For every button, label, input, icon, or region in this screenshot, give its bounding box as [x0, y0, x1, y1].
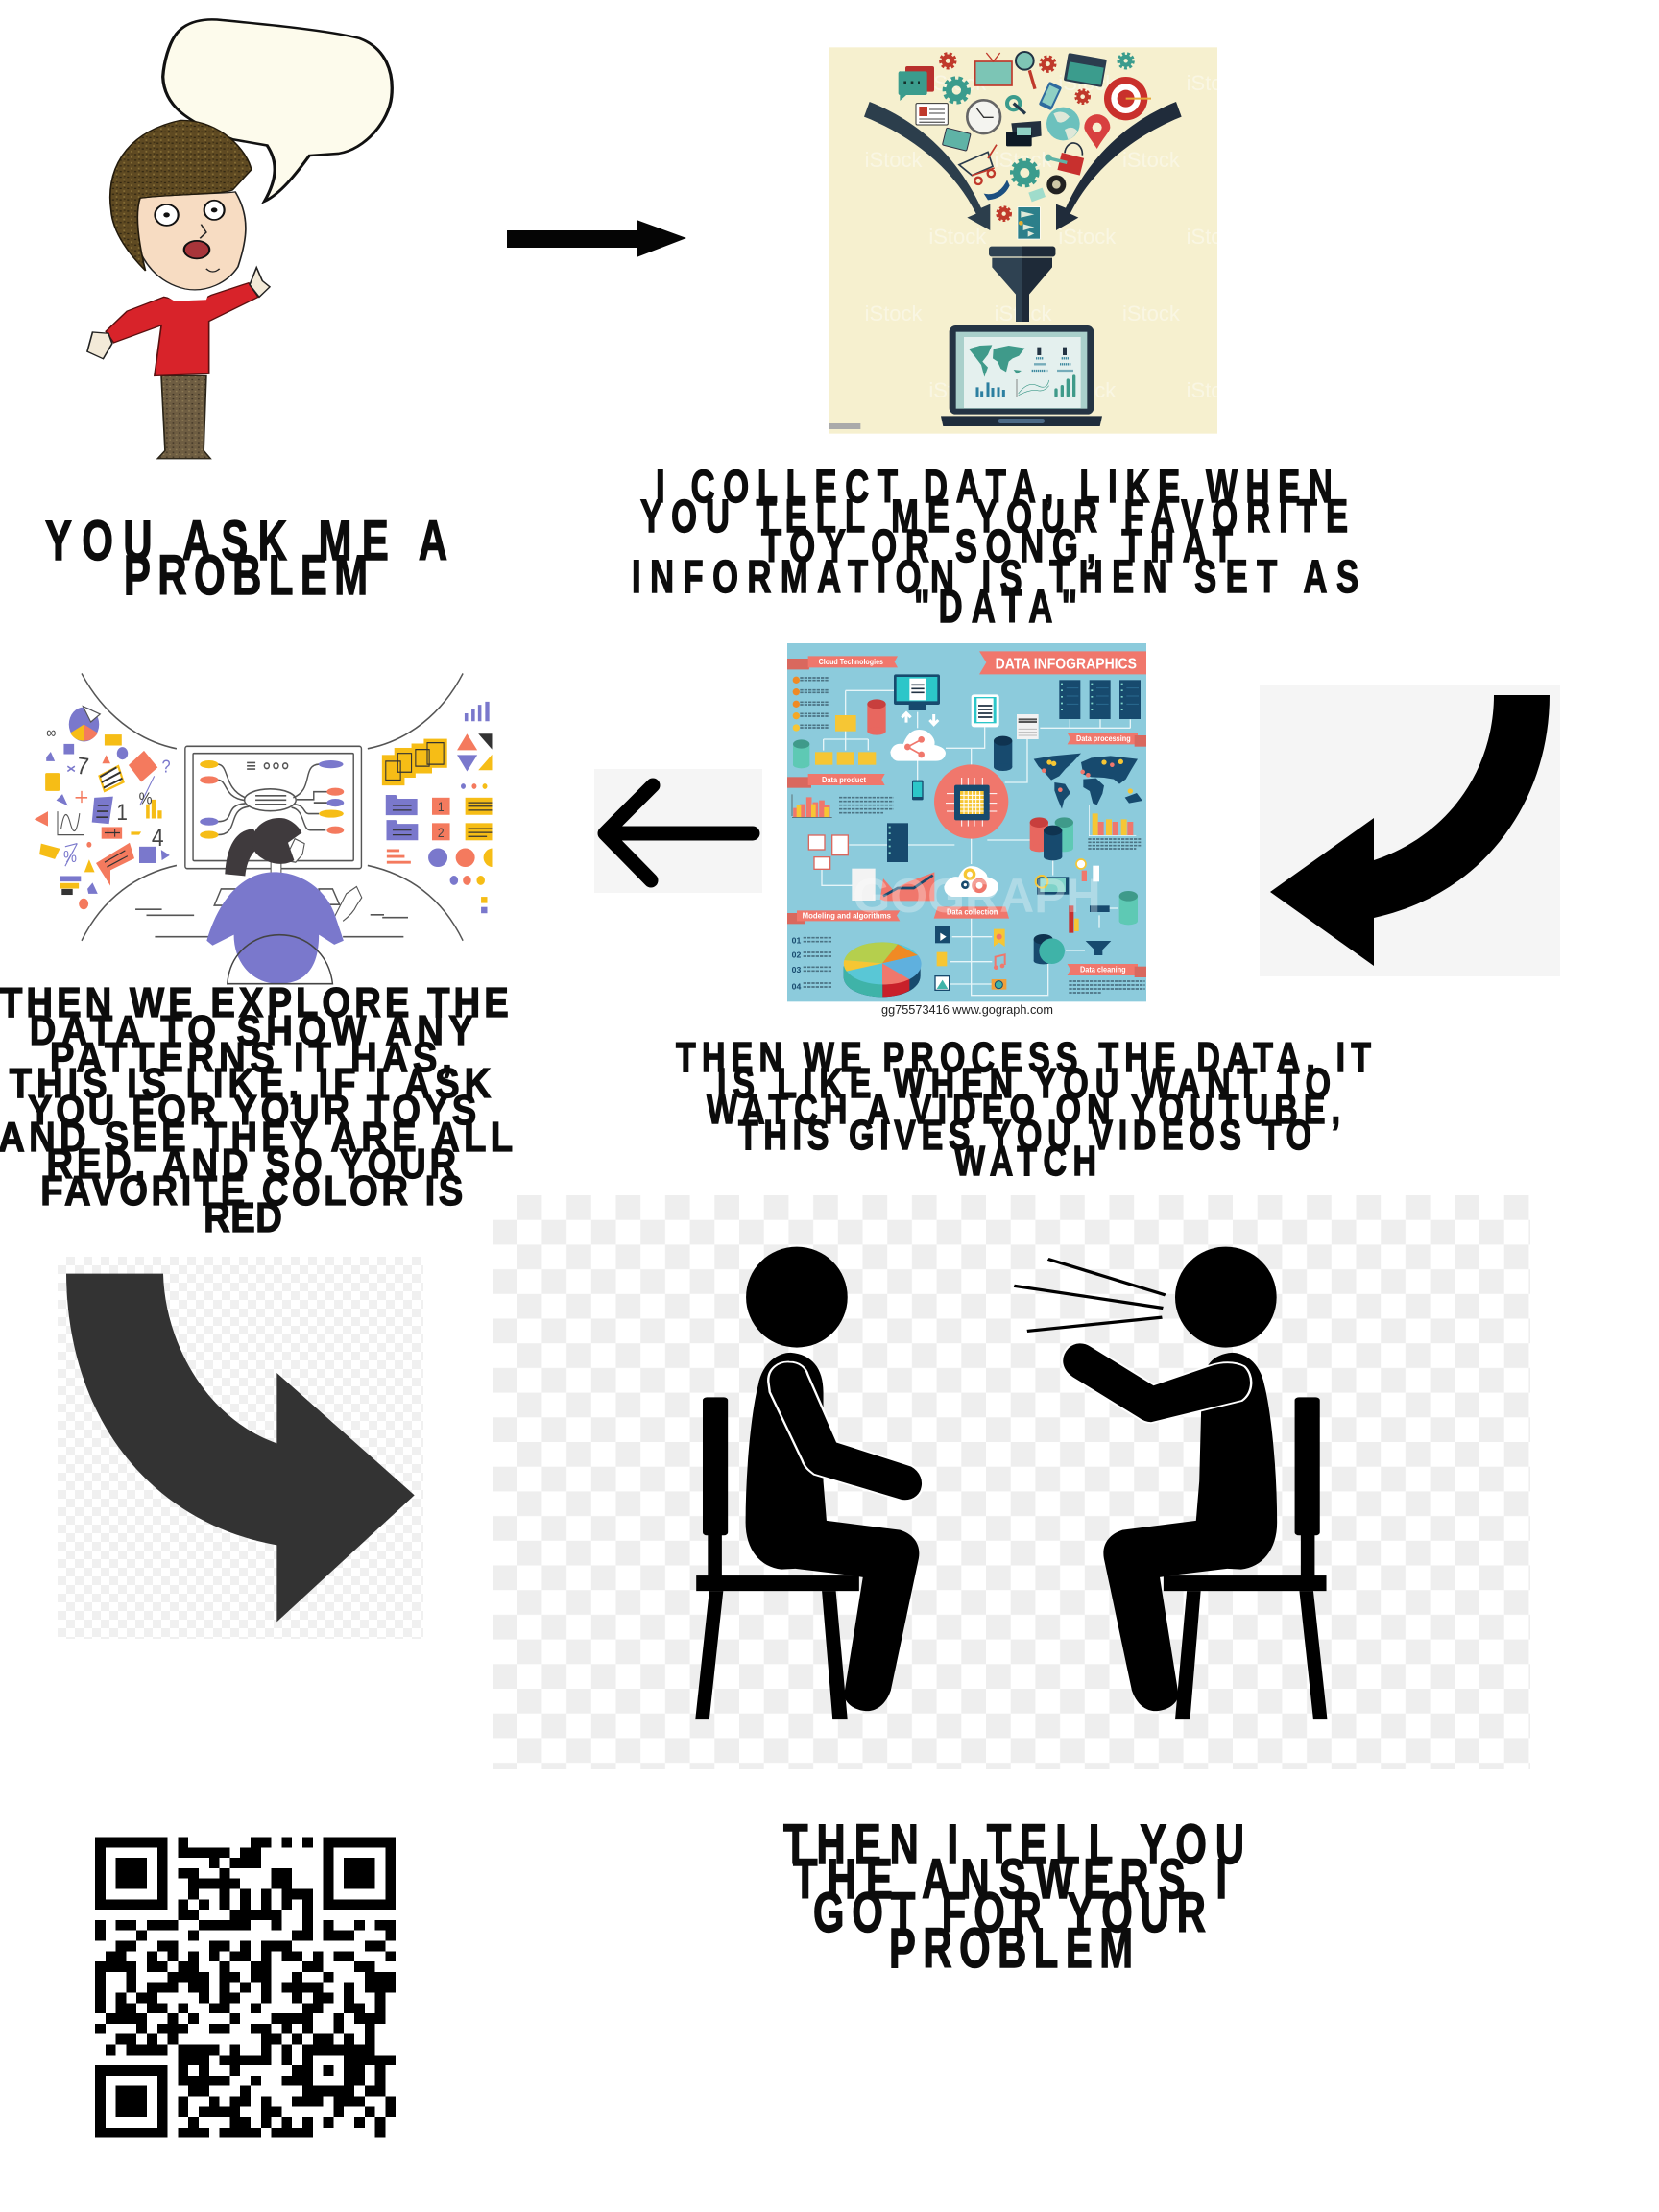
heading: step 2 caption: YOU TELL ME YOUR FAVORITE — [640, 490, 1348, 541]
cloud technology graphics — [815, 674, 1039, 800]
heading: step 5 caption: THE ANSWERS I — [793, 1847, 1227, 1911]
numbered list — [792, 935, 801, 991]
panel: data infographics poster — [787, 643, 1146, 1001]
heading: step 3 caption: THIS IS LIKE, IF I ASK — [10, 1060, 492, 1107]
hands — [87, 268, 270, 359]
heading: step 2 caption: INFORMATION IS THEN SET AS — [632, 550, 1358, 602]
hair — [110, 120, 252, 271]
speaker raised arm — [1062, 1342, 1251, 1423]
red sweater — [106, 283, 258, 375]
left data symbols: 4 — [152, 825, 164, 852]
database cylinders — [793, 699, 1138, 964]
watermarks: iStock — [1058, 378, 1117, 402]
watermarks: iStock — [928, 225, 987, 249]
left data symbols: % — [63, 847, 77, 866]
central chip — [934, 764, 1008, 839]
heading: step 2 caption: "DATA" — [914, 580, 1077, 632]
world map — [1034, 754, 1142, 809]
watermarks: iStock — [1187, 225, 1245, 249]
connector lines — [822, 690, 1130, 996]
heading: step 3 caption: YOU FOR YOUR TOYS — [28, 1087, 476, 1134]
watermarks: iStock — [928, 71, 987, 95]
heading: step 2 caption — [632, 460, 1358, 632]
banner labels: Data collection — [947, 908, 998, 917]
monitor with mind map — [185, 746, 361, 869]
eyes and mouth — [155, 201, 225, 272]
speech bubble — [163, 19, 392, 202]
laptop with dashboard — [941, 325, 1102, 426]
heading: step 3 caption: RED — [204, 1194, 282, 1241]
heading: step 5 caption — [783, 1813, 1244, 1980]
data icons — [899, 52, 1151, 239]
speech lines — [1014, 1259, 1166, 1331]
numbered list: 01 — [792, 935, 801, 945]
left data symbols — [35, 707, 171, 909]
listener — [695, 1247, 919, 1719]
listener arm — [768, 1362, 923, 1501]
banners — [787, 651, 1146, 977]
heading: step 3 caption: RED, AND SO YOUR — [46, 1141, 456, 1188]
watermarks: iStock — [995, 148, 1053, 172]
heading: step 3 caption: AND SEE THEY ARE ALL — [0, 1114, 513, 1161]
banner labels — [803, 657, 1137, 974]
right data symbols — [382, 702, 503, 913]
heading: step 4 caption: WATCH — [954, 1139, 1096, 1185]
right data symbols: 2 — [438, 825, 445, 840]
watermarks: iStock — [865, 301, 924, 325]
arrow: left on grey card — [594, 769, 762, 893]
arrow: right — [507, 220, 686, 257]
woman seen from behind — [206, 818, 344, 984]
numbered list: 02 — [792, 950, 801, 960]
arrow: curved down-right on checker card — [58, 1257, 423, 1639]
servers — [887, 680, 1141, 912]
left data symbols: % — [139, 789, 153, 808]
numbered list: 04 — [792, 981, 801, 991]
speaker — [1103, 1247, 1327, 1719]
watermarks: iStock — [1187, 71, 1245, 95]
right data symbols: 1 — [438, 799, 445, 814]
heading: step 5 caption: THEN I TELL YOU — [783, 1813, 1244, 1876]
left data symbols: ∞ — [46, 725, 56, 742]
heading: step 3 caption: THEN WE EXPLORE THE — [0, 979, 509, 1026]
floor lines — [135, 909, 408, 937]
left data symbols: ? — [162, 756, 171, 777]
heading: step 1 caption: YOU ASK ME A — [45, 509, 447, 572]
heading: step 3 caption: PATTERNS IT HAS, — [50, 1034, 452, 1081]
panel: two seated figures talking — [493, 1195, 1530, 1769]
panel: data funnel illustration — [830, 47, 1245, 434]
funnel — [989, 247, 1055, 322]
banner labels: Cloud Technologies — [819, 658, 883, 666]
watermarks: iStock — [1187, 378, 1245, 402]
heading: step 3 caption: FAVORITE COLOR IS — [40, 1167, 463, 1214]
icon: cartoon boy with speech bubble — [87, 19, 392, 459]
watermarks: iStock — [1058, 71, 1117, 95]
spreadsheet tables — [808, 835, 848, 869]
face — [135, 192, 246, 290]
heading: step 4 caption — [676, 1035, 1371, 1185]
left data symbols: 7 — [75, 752, 90, 781]
heading: step 2 caption: TOY OR SONG, THAT — [761, 519, 1233, 571]
arrow: curved down-left on grey card — [1260, 685, 1560, 976]
keyboard — [214, 889, 340, 905]
left data symbols: 1 — [116, 800, 128, 825]
heading: step 4 caption: WATCH A VIDEO ON YOUTUBE, — [707, 1087, 1340, 1133]
panel: woman exploring data at computer — [35, 673, 503, 984]
heading: step 3 caption — [0, 979, 513, 1241]
watermark GOGRAPH: GOGRAPH — [853, 869, 1101, 923]
QR code — [95, 1842, 396, 2132]
curved funnel arrows — [864, 102, 1182, 230]
watermarks — [865, 71, 1245, 402]
watermarks: iStock — [865, 148, 924, 172]
heading: step 1 caption — [45, 509, 447, 607]
banner labels: Data product — [822, 776, 866, 784]
3D pie chart — [844, 942, 922, 997]
collection icons — [852, 859, 1111, 990]
banner labels: DATA INFOGRAPHICS — [996, 657, 1137, 673]
trousers — [157, 375, 210, 459]
watermarks: iStock — [1122, 301, 1181, 325]
small charts — [792, 794, 1136, 933]
watermarks: iStock — [1058, 225, 1117, 249]
heading: step 2 caption: I COLLECT DATA, LIKE WHEN — [656, 460, 1333, 512]
watermarks: iStock — [928, 378, 987, 402]
heading: step 5 caption: GOT FOR YOUR — [813, 1881, 1206, 1944]
caption: stock image id: gg75573416 www.gograph.com — [881, 1003, 1053, 1017]
banner labels: Data processing — [1076, 734, 1131, 743]
banner labels: Modeling and algorithms — [803, 911, 891, 921]
heading: step 4 caption: THIS GIVES YOU VIDEOS TO — [738, 1113, 1311, 1159]
numbered list: 03 — [792, 965, 801, 974]
watermarks: iStock — [1122, 148, 1181, 172]
banner labels: Data cleaning — [1080, 966, 1126, 974]
heading: step 4 caption: THEN WE PROCESS THE DATA, IT — [676, 1035, 1371, 1081]
heading: step 1 caption: PROBLEM — [124, 543, 368, 607]
heading: step 5 caption: PROBLEM — [889, 1916, 1133, 1980]
window curves — [82, 673, 463, 941]
tiny text lines — [800, 678, 1145, 993]
heading: step 4 caption: IS LIKE WHEN YOU WANT TO — [717, 1061, 1331, 1107]
watermarks: iStock — [995, 301, 1053, 325]
heading: step 3 caption: DATA TO SHOW ANY — [30, 1007, 473, 1054]
